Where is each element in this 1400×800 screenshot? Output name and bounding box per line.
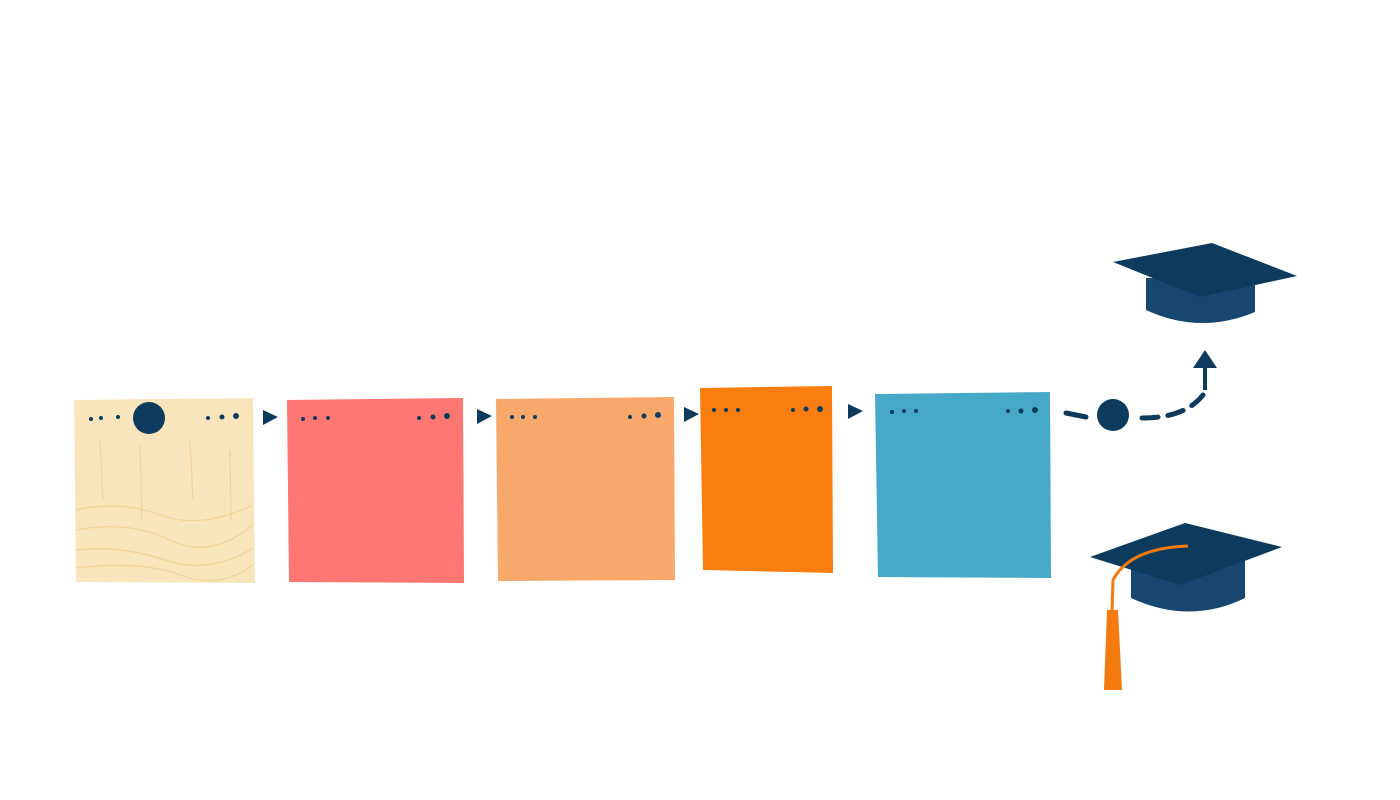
arrow 1 [263, 410, 278, 425]
up arrow [1203, 368, 1207, 390]
icon: graduation cap with tassel [1090, 523, 1282, 690]
arrow 3 [684, 407, 699, 422]
arrow 2 [477, 409, 492, 424]
arrow 4 [848, 404, 863, 419]
dots [89, 413, 239, 421]
step 5: blue box [875, 392, 1051, 578]
dashed path to graduation [1066, 350, 1217, 431]
step 4: orange box [700, 386, 833, 573]
step 3: peach box [496, 397, 675, 581]
step 1: cream box [74, 398, 255, 583]
start marker [133, 402, 165, 434]
step 2: coral box [287, 398, 464, 583]
icon: graduation cap top [1113, 243, 1297, 323]
